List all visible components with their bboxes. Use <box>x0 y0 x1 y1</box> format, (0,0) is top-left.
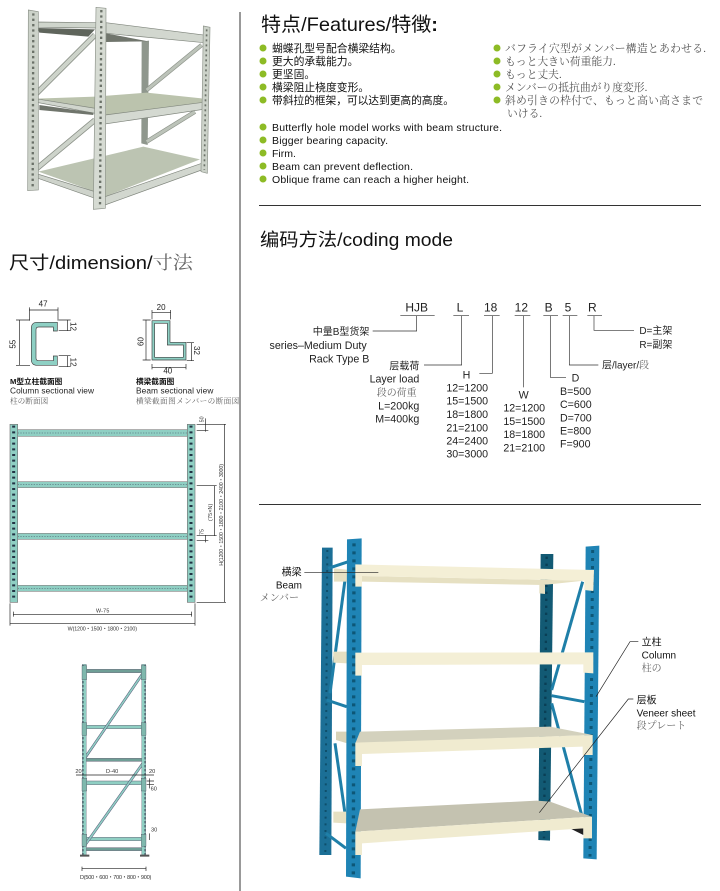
list: Japanese features: バフライ穴型がメンバー構造とあわせる. <box>505 41 706 55</box>
height codes: 18=1800 <box>446 409 488 421</box>
callout: column: 柱の <box>642 661 662 674</box>
icon: column section: 47 <box>39 300 48 309</box>
depth codes: D=700 <box>560 412 592 424</box>
callout: column: 立柱 <box>642 636 662 649</box>
series label <box>270 325 369 365</box>
width codes <box>503 389 545 454</box>
width codes: 18=1800 <box>503 429 545 441</box>
list: English features: Firm. <box>272 148 296 160</box>
frame type label: R=副架 <box>639 339 672 351</box>
connector lines <box>373 316 634 387</box>
icon: beam section: 32 <box>192 346 201 355</box>
list: English features: Oblique frame can reach a higher height. <box>272 174 469 186</box>
list: Chinese features: 更坚固。 <box>272 68 315 81</box>
diagram: front elevation: 50 <box>200 416 206 422</box>
frame type label <box>639 325 672 351</box>
depth codes <box>560 373 592 451</box>
layer label: 层/layer/段 <box>602 359 649 371</box>
callout: veneer sheet: 层板 <box>637 693 657 706</box>
height codes: 15=1500 <box>446 396 488 408</box>
callout: beam <box>260 566 302 604</box>
icon: beam section <box>136 303 201 375</box>
list: Japanese features: もっと大きい荷重能力. <box>505 54 616 68</box>
list: Japanese features: いける. <box>507 107 542 120</box>
rack <box>319 538 599 878</box>
diagram: side elevation: 30 <box>151 828 157 834</box>
dimensions <box>76 775 154 871</box>
depth codes: B=500 <box>560 386 591 398</box>
icon: beam section: 60 <box>136 337 145 346</box>
diagram: front elevation <box>10 416 226 633</box>
layer load label: Layer load <box>370 374 419 386</box>
layer load label: L=200kg <box>378 400 419 412</box>
uprights <box>80 664 149 856</box>
list: Chinese features: 蝴蝶孔型号配合横梁结构。 <box>272 41 402 55</box>
width codes: W <box>519 389 530 401</box>
callout: veneer sheet: Veneer sheet <box>637 709 696 720</box>
depth codes: F=900 <box>560 439 591 451</box>
diagonal braces <box>83 672 144 846</box>
code letters <box>405 301 597 315</box>
height codes: 21=2100 <box>446 422 488 434</box>
diagram: front elevation: W-75 <box>96 609 109 615</box>
diagram: side elevation: 60 <box>151 786 157 792</box>
list: Japanese features: 斜め引きの枠付で、もっと高い高さまで <box>505 93 703 107</box>
list: English features <box>260 122 502 186</box>
layer load label: 层载荷 <box>389 360 419 372</box>
height codes: 12=1200 <box>446 383 488 395</box>
diagram: front elevation: H(1200・1500・1800・2100・2400・3000) <box>219 464 225 566</box>
icon: beam section: 20 <box>157 303 166 312</box>
layer load label: M=400kg <box>375 413 419 425</box>
width codes: 15=1500 <box>503 416 545 428</box>
frame type label: D=主架 <box>639 325 672 337</box>
leader lines <box>304 572 638 813</box>
code letters: L <box>457 301 464 315</box>
callout: column <box>642 636 676 674</box>
depth codes: D <box>572 373 580 385</box>
depth codes: E=800 <box>560 425 591 437</box>
photo: blue rack with callouts <box>260 538 696 878</box>
photo: grey rack <box>28 7 210 209</box>
caption: beam section <box>136 376 240 405</box>
caption: column section: M型立柱截面图 <box>10 376 63 386</box>
beams <box>18 430 187 591</box>
list: Chinese features: 横梁阻止桡度变形。 <box>272 80 369 94</box>
code letters: B <box>545 301 553 315</box>
list: Chinese features: 带斜拉的框架，可以达到更高的高度。 <box>272 93 454 107</box>
list: English features: Bigger bearing capacity. <box>272 135 388 147</box>
dimensions <box>10 418 226 626</box>
icon: column section: 55 <box>9 339 18 349</box>
diagram: front elevation: W(1200・1500・1800・2100) <box>68 627 137 633</box>
list: Chinese features: 更大的承载能力。 <box>272 54 358 68</box>
list: English features: Beam can prevent deflection. <box>272 161 413 173</box>
height codes <box>446 369 488 461</box>
list: Chinese features <box>260 41 454 107</box>
series label: series–Medium Duty <box>270 340 367 352</box>
caption: column section <box>10 376 95 405</box>
depth codes: C=600 <box>560 399 592 411</box>
diagram: side elevation: 20 <box>149 769 155 775</box>
list: Japanese features <box>494 41 706 120</box>
caption: column section: Column sectional view <box>10 386 95 396</box>
height codes: 30=3000 <box>446 449 488 461</box>
callout: beam: Beam <box>276 581 302 592</box>
diagram: side elevation: 20 <box>75 769 82 775</box>
icon: column section: 12 <box>68 358 77 367</box>
layer load label <box>370 360 419 425</box>
diagrams: cross sections <box>9 300 240 405</box>
list: Japanese features: もっと丈夫. <box>505 67 562 81</box>
series label: 中量B型货架 <box>313 325 369 338</box>
icon: column section: 12 <box>68 322 77 331</box>
layer load label: 段の荷重 <box>377 386 417 399</box>
list: English features: Butterfly hole model works with beam structure. <box>272 122 502 134</box>
code letters: R <box>588 301 597 315</box>
icon: column section <box>9 300 77 367</box>
diagram: side elevation <box>75 664 157 881</box>
diagram: front elevation: (75×N) <box>208 503 214 521</box>
series label: Rack Type B <box>309 353 369 365</box>
width codes: 21=2100 <box>503 442 545 454</box>
caption: beam section: Beam sectional view <box>136 386 214 396</box>
callout: beam: 横梁 <box>282 566 302 579</box>
height codes: 24=2400 <box>446 435 488 447</box>
caption: column section: 柱の断面図 <box>10 395 49 405</box>
code letters: HJB <box>405 301 428 315</box>
diagram: front elevation: 75 <box>200 529 206 535</box>
callout: veneer sheet <box>637 693 696 732</box>
columns <box>10 424 195 602</box>
heading: coding mode: 编码方法/coding mode <box>260 230 453 250</box>
callout: beam: メンバー <box>260 593 299 604</box>
diagram: coding mode <box>270 301 672 461</box>
caption: beam section: 横梁截面图 <box>136 376 175 386</box>
icon: beam section: 40 <box>163 366 173 375</box>
callout: column: Column <box>642 651 676 662</box>
code letters: 5 <box>565 301 572 315</box>
diagram: side elevation: D(500・600・700・800・900) <box>80 875 151 881</box>
width codes: 12=1200 <box>503 403 545 415</box>
code letters: 18 <box>484 301 498 315</box>
caption: beam section: 横梁截面图メンバーの断面図 <box>136 395 240 405</box>
code letters: 12 <box>515 301 528 315</box>
callout: veneer sheet: 段プレート <box>637 720 686 732</box>
diagram: side elevation: D-40 <box>106 769 118 775</box>
heading: dimension: 尺寸/dimension/ 寸法 <box>9 253 194 273</box>
height codes: H <box>463 369 470 381</box>
list: Japanese features: メンバーの抵抗曲がり度変形. <box>505 80 647 94</box>
heading: features: 特点/Features/特徴: <box>261 14 438 36</box>
